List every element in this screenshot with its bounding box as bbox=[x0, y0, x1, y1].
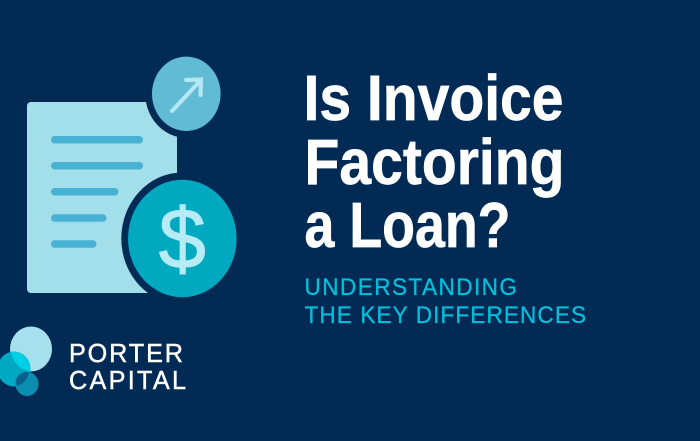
subtitle: THE KEY DIFFERENCES bbox=[304, 301, 586, 328]
icon: growth arrow badge bbox=[152, 57, 221, 131]
icon: invoice document bbox=[27, 50, 243, 304]
logo wordmark: CAPITAL bbox=[69, 367, 186, 395]
icon: dollar coin: $ bbox=[159, 192, 206, 287]
title: a Loan? bbox=[304, 189, 510, 261]
title: Factoring bbox=[304, 126, 564, 198]
icon: dollar coin bbox=[128, 180, 237, 297]
title bbox=[304, 62, 564, 261]
subtitle bbox=[304, 273, 586, 328]
subtitle: UNDERSTANDING bbox=[304, 273, 517, 300]
logo mark bbox=[0, 326, 52, 396]
logo wordmark bbox=[69, 340, 186, 395]
logo: Porter Capital bbox=[0, 326, 186, 396]
title: Is Invoice bbox=[304, 62, 564, 134]
logo wordmark: PORTER bbox=[69, 340, 183, 368]
